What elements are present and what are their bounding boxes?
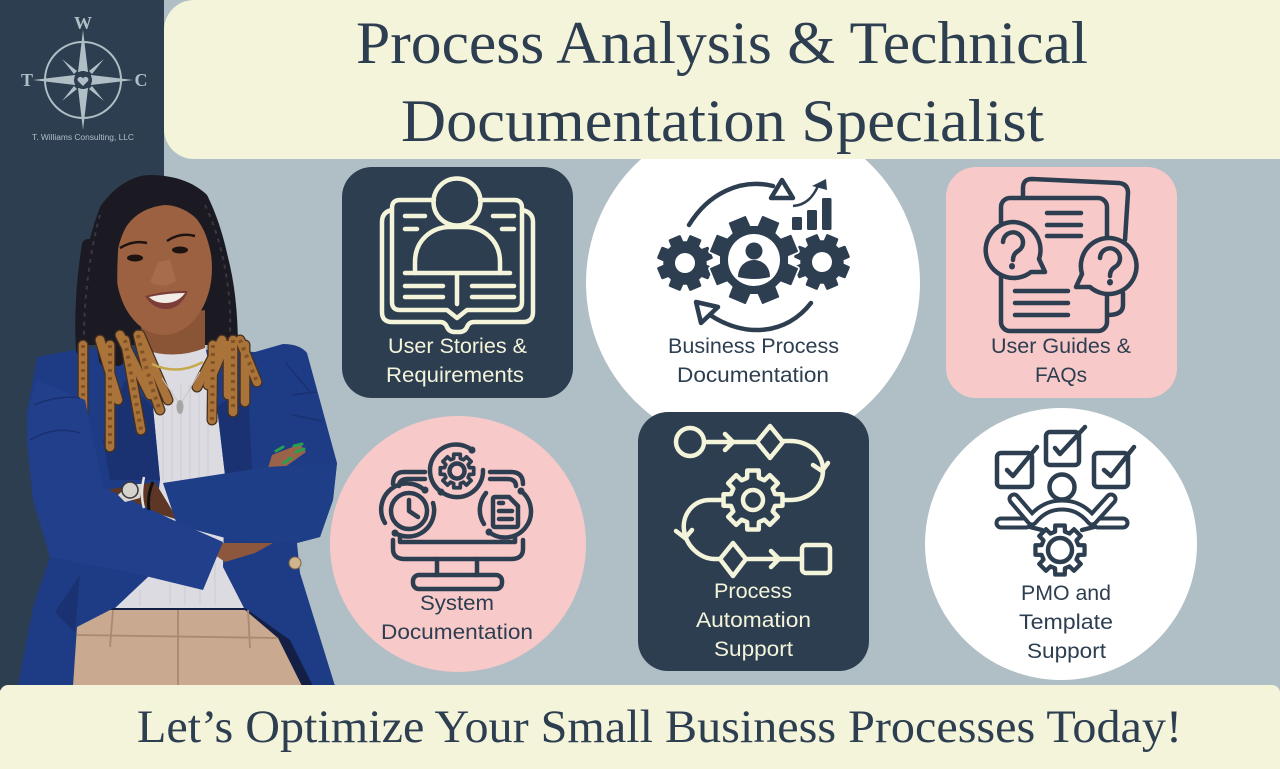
label: pmo and template support: Support (1027, 640, 1106, 663)
logo: compass: C (134, 70, 148, 90)
panel: business process circle (586, 116, 920, 450)
footer banner (0, 685, 1280, 769)
icon: person with checkboxes and gear (997, 427, 1134, 575)
icon: gears and process cycle (650, 179, 857, 330)
label: system documentation: System (420, 592, 494, 615)
header banner (164, 0, 1280, 159)
label: pmo and template support: PMO and (1021, 582, 1111, 605)
title: Process Analysis & Technical (356, 10, 1088, 76)
panel: process automation card (638, 412, 869, 671)
logo: compass: W (74, 13, 92, 33)
logo: compass: T (21, 70, 33, 90)
icon: person over open book (382, 178, 533, 332)
panel: user guides card (946, 167, 1177, 398)
panel: system documentation circle (330, 416, 586, 672)
label: user guides and faqs: FAQs (1035, 364, 1087, 387)
label: user stories and requirements: User Stories & (388, 335, 527, 358)
title: Documentation Specialist (401, 88, 1044, 154)
label: process automation support: Automation (696, 609, 811, 632)
label: pmo and template support: Template (1019, 611, 1113, 634)
label: user guides and faqs: User Guides & (991, 335, 1131, 358)
label: process automation support: Process (714, 580, 792, 603)
logo: compass: T. Williams Consulting, LLC (32, 133, 134, 142)
label: system documentation: Documentation (381, 621, 533, 644)
icon: workflow diagram (676, 426, 830, 576)
label: business process documentation: Business Process (668, 335, 839, 358)
label: process automation support: Support (714, 638, 793, 661)
panel: user stories card (342, 167, 573, 398)
logo: compass (21, 13, 148, 142)
label: user stories and requirements: Requirements (386, 364, 524, 387)
call to action: Let’s Optimize Your Small Business Processes Today! (137, 701, 1182, 753)
label: business process documentation: Documentation (677, 364, 829, 387)
portrait: consultant with crossed arms (18, 175, 337, 686)
panel: pmo circle (925, 408, 1197, 680)
icon: documents with question bubbles (986, 179, 1137, 331)
icon: monitor with gear clock and document (381, 445, 531, 589)
left navy sidebar (0, 0, 164, 690)
